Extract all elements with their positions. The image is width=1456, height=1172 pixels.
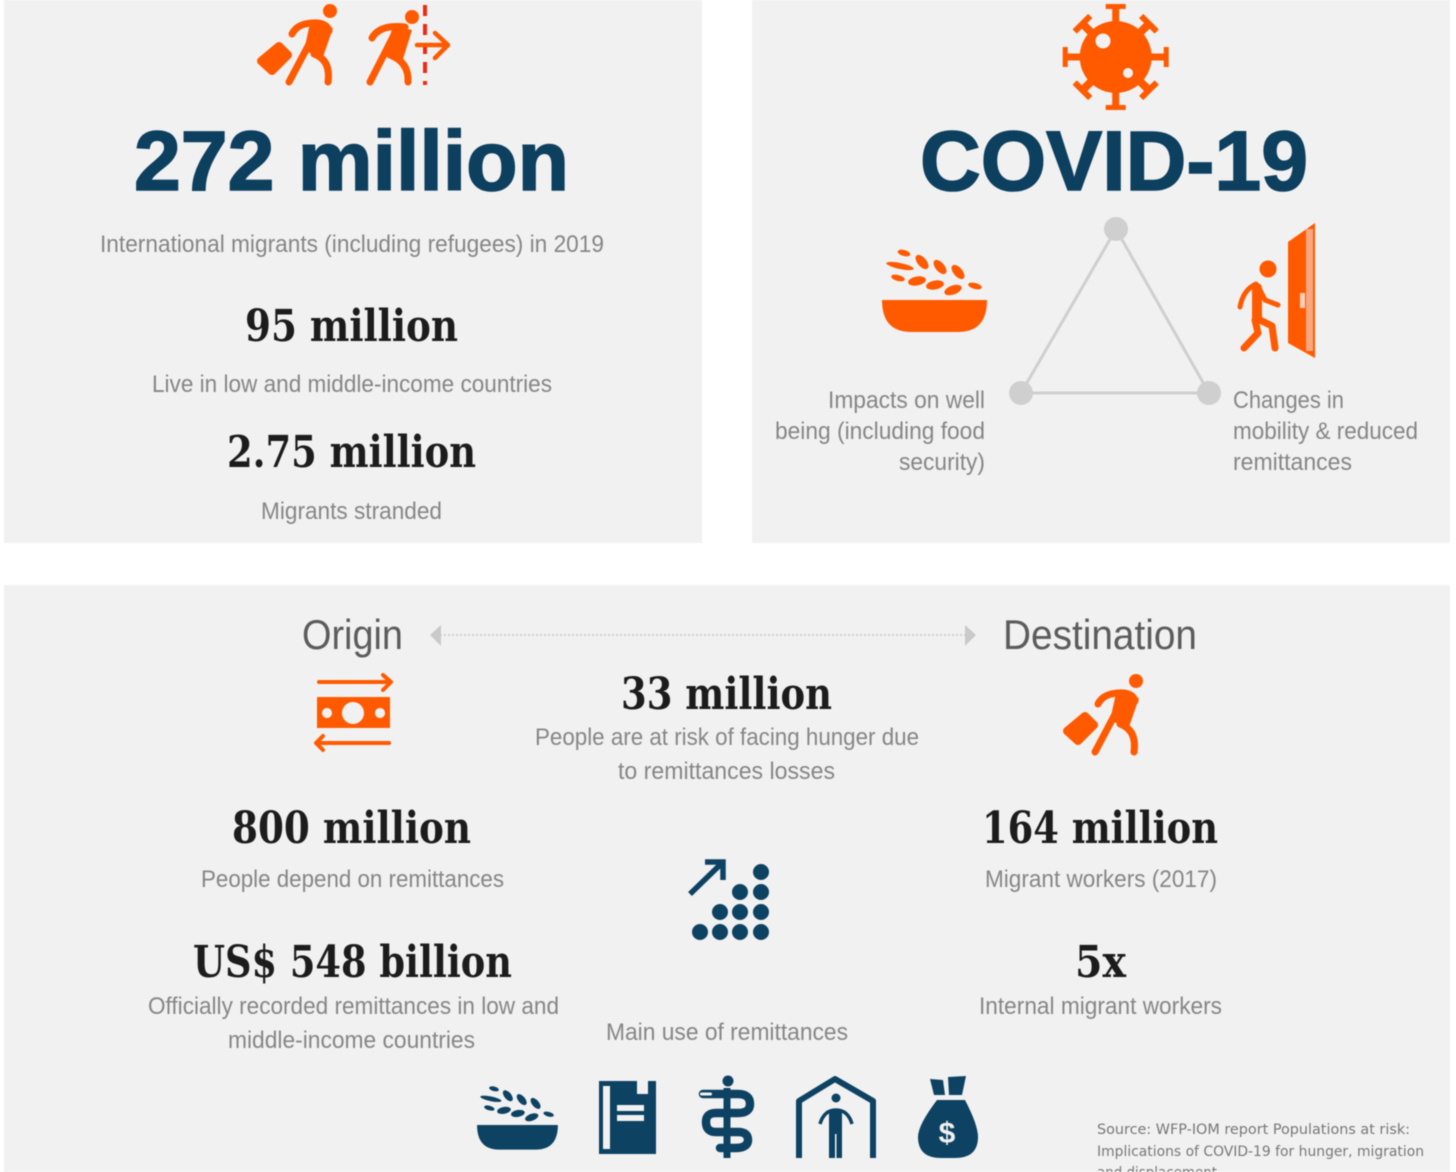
stat: 800 million: 800 million [232, 803, 471, 854]
text: internal migrant workers: Internal migrant workers [979, 993, 1222, 1020]
heading: destination: Destination [1003, 611, 1197, 658]
icon: book [599, 1081, 656, 1154]
panel: remittances [4, 585, 1450, 1172]
text: source: Implications of COVID-19 for hunger, migration [1097, 1144, 1424, 1160]
text: officially recorded remittances [148, 993, 559, 1054]
text: impacts on well being: security) [899, 449, 985, 476]
text: depend on remittances: People depend on remittances [201, 866, 504, 893]
icon: food bowl [882, 248, 987, 332]
stat: 5x: 5x [1075, 937, 1127, 988]
arrow: origin to destination [430, 625, 976, 646]
text: risk of hunger: to remittances losses [618, 758, 835, 785]
panel: COVID-19 [752, 0, 1450, 543]
icon: health caduceus [700, 1076, 750, 1158]
triangle diagram [1009, 217, 1221, 405]
icon: traveller with suitcase [1067, 674, 1143, 752]
text: changes in mobility [1233, 387, 1418, 476]
text: low and middle income: Live in low and middle-income countries [152, 371, 552, 398]
text: risk of hunger: People are at risk of facing hunger due [535, 724, 919, 751]
text: impacts on well being: being (including food [775, 418, 985, 445]
text: main use of remittances: Main use of remittances [606, 1019, 848, 1046]
text: migrant workers: Migrant workers (2017) [985, 866, 1217, 893]
text: changes in mobility: mobility & reduced [1233, 418, 1418, 445]
icon: person crossing border [370, 5, 448, 85]
icon: person leaving through door [1240, 223, 1315, 358]
icon: food bowl navy [477, 1085, 558, 1150]
text: migrants stranded: Migrants stranded [261, 498, 442, 525]
stat: 95 million: 95 million [245, 301, 458, 352]
heading: 272 million: 272 million [134, 114, 569, 208]
icon: money bag: $ [939, 1117, 956, 1150]
text: changes in mobility: Changes in [1233, 387, 1344, 414]
panel: migrants [4, 0, 702, 543]
heading: origin: Origin [302, 611, 403, 658]
icon: shelter [799, 1079, 873, 1158]
stat: US$ 548 billion: US$ 548 billion [193, 937, 512, 988]
text: impacts on well being: Impacts on well [828, 387, 985, 414]
icon: money transfer [316, 675, 391, 750]
icon: money bag [918, 1076, 978, 1158]
text: international migrants: International migrants (including refugees) in 2019 [100, 231, 604, 258]
stat: 2.75 million: 2.75 million [227, 427, 476, 478]
stat: 164 million: 164 million [982, 803, 1218, 854]
heading: COVID-19: COVID-19 [920, 114, 1308, 208]
icon: growth dots [690, 862, 769, 940]
text: source: Source: WFP-IOM report Populations at risk: [1097, 1122, 1410, 1138]
stat: 33 million: 33 million [621, 669, 832, 720]
icon: virus [1063, 4, 1169, 110]
text: source [1097, 1122, 1424, 1172]
text: risk of hunger [535, 724, 919, 785]
text: changes in mobility: remittances [1233, 449, 1352, 476]
icon: traveller with suitcase [261, 4, 337, 82]
text: officially recorded remittances: Officially recorded remittances in low and [148, 993, 559, 1020]
text: impacts on well being [775, 387, 985, 476]
text: officially recorded remittances: middle-income countries [228, 1027, 475, 1054]
